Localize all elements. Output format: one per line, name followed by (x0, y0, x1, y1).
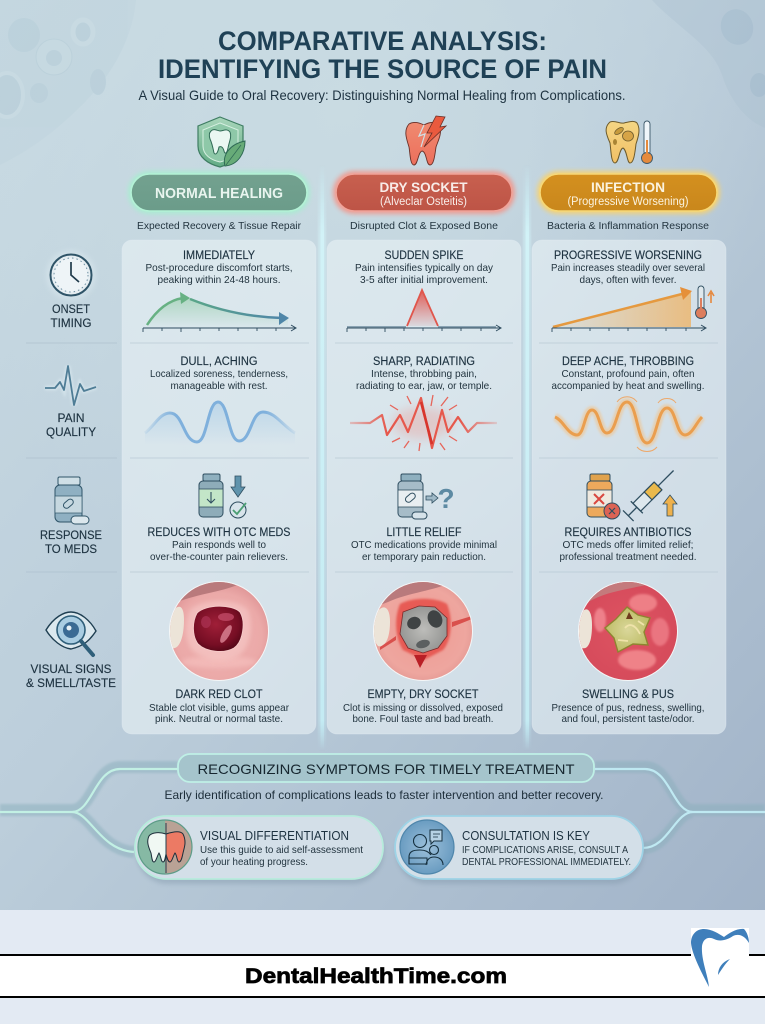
text: progressive worsening: PROGRESSIVE WORSENING (554, 250, 702, 262)
chart: progressive line (552, 286, 714, 332)
text: reduces with otc meds (148, 527, 291, 563)
text: swelling and pus: and foul, persistent taste/odor. (562, 713, 694, 725)
text: progressive worsening: days, often with fever. (580, 274, 676, 286)
icon: bottle with question mark: ? (437, 483, 455, 514)
icon: bottle with down arrow (199, 474, 246, 518)
title: IDENTIFYING THE SOURCE OF PAIN (158, 54, 607, 84)
icon: split tooth (138, 820, 192, 874)
icon: bottle with question mark (398, 474, 455, 519)
text: sharp radiating: SHARP, RADIATING (373, 356, 475, 368)
text: dull aching: DULL, ACHING (180, 356, 258, 368)
text: sharp radiating: radiating to ear, jaw, or temple. (356, 380, 492, 392)
text: sudden spike: SUDDEN SPIKE (384, 250, 464, 262)
chart: spike (347, 290, 501, 332)
photo: dry socket (372, 580, 474, 682)
column subheadings: Expected Recovery & Tissue Repair (137, 220, 301, 232)
pill: normal healing (128, 171, 310, 214)
text: dark red clot: Stable clot visible, gums appear (149, 702, 289, 714)
text: dull aching: Localized soreness, tenderness, (150, 368, 288, 380)
callout: visual differentiation: Use this guide to aid self-assessment (200, 844, 363, 856)
title: COMPARATIVE ANALYSIS: (218, 26, 547, 56)
callout: visual differentiation: VISUAL DIFFERENTIATION (200, 829, 349, 843)
text: deep ache: Constant, profound pain, often (562, 368, 695, 380)
text: requires antibiotics: REQUIRES ANTIBIOTICS (564, 527, 692, 539)
text: empty dry socket: EMPTY, DRY SOCKET (368, 689, 478, 701)
row label: onset timing (46, 250, 96, 330)
row label: visual signs (26, 612, 116, 690)
callout: visual differentiation (135, 816, 384, 884)
pill: infection: INFECTION (591, 179, 665, 195)
text: dark red clot: pink. Neutral or normal taste. (155, 713, 283, 725)
icon: infected tooth and thermometer (606, 121, 652, 164)
text: progressive worsening: Pain increases steadily over several (551, 262, 705, 274)
row label dividers (26, 343, 117, 572)
text: sudden spike: Pain intensifies typically on day (355, 262, 494, 274)
callout: consultation is key: IF COMPLICATIONS ARISE, CONSULT A (462, 844, 628, 856)
connector lines (0, 767, 765, 852)
column subheadings (137, 220, 709, 232)
row label: pain quality: PAIN (58, 411, 84, 425)
text: immediately: peaking within 24-48 hours. (158, 274, 280, 286)
photo: swelling and pus (577, 580, 679, 682)
text: deep ache: DEEP ACHE, THROBBING (562, 356, 694, 368)
chart: throbbing wave (555, 397, 702, 452)
pill: dry socket (333, 171, 515, 214)
text: immediately (146, 250, 292, 286)
text: reduces with otc meds: over-the-counter pain relievers. (150, 551, 288, 563)
text: requires antibiotics (560, 527, 696, 563)
pill: dry socket: DRY SOCKET (380, 179, 468, 195)
callout: visual differentiation: of your heating progress. (200, 856, 308, 868)
column subheadings: Bacteria & Inflammation Response (547, 220, 709, 232)
text: dull aching (150, 356, 288, 392)
footer band (0, 954, 765, 998)
text: little relief (351, 527, 497, 563)
callout: consultation is key: CONSULTATION IS KEY (462, 829, 591, 843)
row label: response to meds (40, 477, 102, 556)
row label: onset timing: TIMING (50, 316, 92, 330)
icon: dentist and patient (400, 820, 454, 874)
pill: dry socket: (Alveclar Osteitis) (380, 196, 467, 208)
row label: response to meds: TO MEDS (45, 542, 97, 556)
icon: shield tooth leaf (198, 117, 245, 167)
text: empty dry socket: bone. Foul taste and bad breath. (352, 713, 494, 725)
text: immediately: Post-procedure discomfort starts, (146, 262, 292, 274)
text: reduces with otc meds: REDUCES WITH OTC MEDS (148, 527, 291, 539)
row label: visual signs: VISUAL SIGNS (30, 662, 112, 676)
chart: dull wave (145, 402, 295, 445)
column subheadings: Disrupted Clot & Exposed Bone (350, 220, 498, 232)
icon: bottle with x and syringe (587, 464, 680, 522)
subtitle: A Visual Guide to Oral Recovery: Distinguishing Normal Healing from Complications. (138, 87, 626, 103)
banner: recognizing symptoms: RECOGNIZING SYMPTOMS FOR TIMELY TREATMENT (198, 761, 575, 777)
text: empty dry socket (343, 689, 503, 725)
callout: consultation is key: DENTAL PROFESSIONAL IMMEDIATELY. (462, 856, 631, 868)
text: dark red clot (149, 689, 289, 725)
text: deep ache (552, 356, 704, 392)
text: swelling and pus: SWELLING & PUS (582, 689, 674, 701)
row label: response to meds: RESPONSE (40, 528, 102, 542)
chart: sharp wave (350, 395, 497, 451)
text: sharp radiating (356, 356, 492, 392)
text: reduces with otc meds: Pain responds well to (172, 539, 266, 551)
pill: normal healing: NORMAL HEALING (155, 185, 283, 202)
text: sharp radiating: Intense, throbbing pain, (371, 368, 477, 380)
text: deep ache: accompanied by heat and swelling. (552, 380, 704, 392)
text: requires antibiotics: professional treatment needed. (560, 551, 696, 563)
text: little relief: er temporary pain reduction. (362, 551, 486, 563)
icon: cracked tooth with lightning (406, 116, 446, 165)
text: swelling and pus: Presence of pus, redness, swelling, (552, 702, 704, 714)
text: sudden spike: 3-5 after initial improvement. (360, 274, 488, 286)
pill: infection: (Progressive Worsening) (568, 196, 689, 208)
panel: dry socket (327, 240, 521, 734)
text: requires antibiotics: OTC meds offer limited relief; (562, 539, 694, 551)
text: empty dry socket: Clot is missing or dissolved, exposed (343, 702, 503, 714)
title (158, 26, 607, 84)
panel: normal healing (122, 240, 316, 734)
photo: dark red clot (168, 580, 270, 682)
row label: pain quality: QUALITY (46, 425, 96, 439)
row label: onset timing: ONSET (52, 302, 91, 316)
column separators (318, 165, 531, 750)
text: sudden spike (355, 250, 494, 286)
footer band: DentalHealthTime.com (245, 965, 507, 988)
text: dull aching: manageable with rest. (170, 380, 268, 392)
row label: pain quality (45, 366, 96, 439)
text: little relief: OTC medications provide minimal (351, 539, 497, 551)
text: dark red clot: DARK RED CLOT (176, 689, 262, 701)
text: little relief: LITTLE RELIEF (386, 527, 462, 539)
chart: normal onset curve (143, 292, 296, 332)
background cells top left (0, 0, 136, 165)
pill: infection (537, 171, 720, 214)
panel: infection (532, 240, 726, 734)
text: early identification: Early identification of complications leads to faster intervention and better recovery. (164, 788, 604, 802)
row label: visual signs: & SMELL/TASTE (26, 676, 116, 690)
banner: recognizing symptoms (178, 754, 594, 782)
logo: tooth (691, 928, 749, 988)
text: swelling and pus (552, 689, 704, 725)
background cells top right (652, 0, 765, 128)
callout: consultation is key (395, 816, 644, 884)
text: immediately: IMMEDIATELY (183, 250, 255, 262)
text: progressive worsening (551, 250, 705, 286)
